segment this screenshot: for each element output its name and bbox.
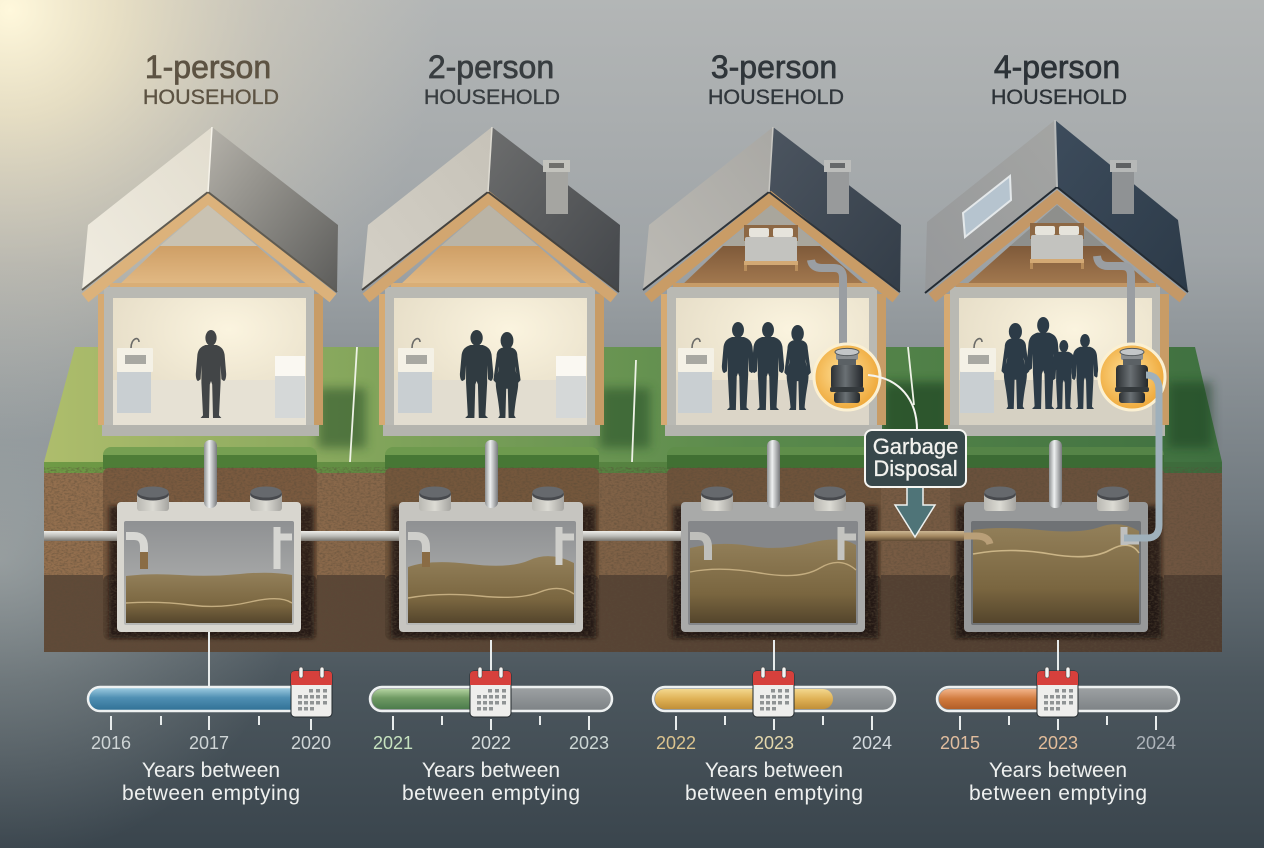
panel: house 2, two people bbox=[362, 127, 620, 436]
caption bbox=[969, 759, 1147, 805]
panel: house 3, three people bbox=[643, 127, 901, 436]
roof bbox=[362, 127, 492, 290]
progress bar bbox=[937, 687, 1179, 711]
heading: 3-person household: HOUSEHOLD bbox=[708, 85, 844, 109]
panel: septic tank 2 bbox=[399, 440, 583, 632]
sludge bbox=[126, 573, 292, 623]
floor bbox=[959, 380, 1152, 425]
timeline: 3-person bbox=[653, 640, 895, 805]
year labels: 2024 bbox=[1136, 733, 1176, 753]
progress bar bbox=[370, 687, 612, 711]
floor bbox=[676, 380, 869, 425]
disposal callout icon: house 4 bbox=[1099, 344, 1165, 410]
calendar icon bbox=[753, 667, 794, 717]
lids bbox=[984, 486, 1129, 511]
lids bbox=[419, 486, 564, 511]
appliance bbox=[275, 356, 305, 418]
year labels bbox=[91, 733, 331, 753]
year labels: 2017 bbox=[189, 733, 229, 753]
year labels: 2021 bbox=[373, 733, 413, 753]
caption: Years between bbox=[705, 759, 843, 782]
leader line to disposal icon bbox=[868, 375, 917, 430]
chimney bbox=[824, 160, 851, 214]
disposal callout icon: house 3 bbox=[814, 344, 880, 410]
heading: 1-person household bbox=[143, 49, 279, 109]
panel: septic tank 3 bbox=[681, 440, 865, 632]
appliance bbox=[556, 356, 586, 418]
heading: 3-person household bbox=[708, 49, 844, 109]
drain pipe bbox=[1097, 256, 1131, 346]
progress bar bbox=[88, 687, 328, 711]
lawn surface bbox=[44, 347, 1222, 462]
vent pipe bbox=[767, 440, 780, 508]
year labels: 2016 bbox=[91, 733, 131, 753]
person silhouette bbox=[196, 330, 226, 418]
roof bbox=[643, 127, 773, 290]
caption: between emptying bbox=[685, 782, 863, 805]
pit around tank 1 bbox=[103, 447, 317, 640]
sink unit bbox=[960, 339, 996, 413]
roof bbox=[82, 127, 212, 290]
bed bbox=[1030, 223, 1084, 269]
progress bar bbox=[653, 687, 895, 711]
disposal drain pipe: house 4 to tank bbox=[1124, 375, 1159, 538]
calendar icon bbox=[291, 667, 332, 717]
tank interior bbox=[124, 521, 294, 625]
tank shell bbox=[681, 502, 865, 632]
heading: 2-person household: 2-person bbox=[428, 49, 554, 85]
ground cross-section block bbox=[44, 347, 1222, 652]
caption bbox=[402, 759, 580, 805]
bed bbox=[744, 225, 798, 271]
inlet and outlet bbox=[690, 527, 856, 560]
sink unit bbox=[117, 339, 153, 413]
tick marks bbox=[676, 716, 872, 730]
panel: septic tank 1 bbox=[117, 440, 301, 632]
year labels: 2024 bbox=[852, 733, 892, 753]
house walls and room bbox=[661, 287, 886, 436]
lids bbox=[701, 486, 846, 511]
year labels: 2022 bbox=[656, 733, 696, 753]
drain pipe bbox=[811, 260, 843, 348]
scum line bbox=[690, 562, 856, 576]
caption: between emptying bbox=[969, 782, 1147, 805]
tank interior bbox=[971, 521, 1141, 625]
tick marks bbox=[393, 716, 589, 730]
sludge bbox=[408, 556, 574, 623]
callout: garbage disposal: Disposal bbox=[873, 456, 958, 481]
heading: 1-person household: HOUSEHOLD bbox=[143, 85, 279, 109]
family silhouettes bbox=[1001, 317, 1098, 409]
attic bbox=[723, 205, 820, 246]
inlet and outlet bbox=[408, 527, 574, 567]
heading: 2-person household: HOUSEHOLD bbox=[424, 85, 560, 109]
family silhouettes bbox=[460, 330, 521, 418]
year labels: 2023 bbox=[754, 733, 794, 753]
sink unit bbox=[398, 339, 434, 413]
timeline: 4-person bbox=[937, 640, 1179, 805]
callout: garbage disposal bbox=[865, 430, 966, 487]
soil grain bbox=[44, 467, 1222, 652]
family silhouettes bbox=[722, 322, 811, 410]
inlet and outlet bbox=[126, 527, 292, 569]
scum line bbox=[126, 599, 292, 606]
caption: Years between bbox=[142, 759, 280, 782]
chimney bbox=[543, 160, 570, 214]
pit around tank 2 bbox=[385, 447, 599, 640]
year labels bbox=[940, 733, 1176, 753]
caption: Years between bbox=[422, 759, 560, 782]
calendar icon bbox=[470, 667, 511, 717]
house walls and room bbox=[379, 287, 604, 436]
heading: 2-person household bbox=[424, 49, 560, 109]
pit around tank 3 bbox=[667, 447, 881, 640]
tick marks bbox=[111, 716, 311, 730]
scum line bbox=[973, 545, 1139, 557]
year labels: 2023 bbox=[569, 733, 609, 753]
vent pipe bbox=[204, 440, 217, 508]
panel: septic tank 4 bbox=[964, 440, 1148, 632]
tank shell bbox=[117, 502, 301, 632]
tank shell bbox=[964, 502, 1148, 632]
year labels: 2020 bbox=[291, 733, 331, 753]
caption: Years between bbox=[989, 759, 1127, 782]
year labels bbox=[373, 733, 609, 753]
tick marks bbox=[960, 716, 1156, 730]
connecting pipes between tanks bbox=[44, 531, 967, 541]
caption: between emptying bbox=[122, 782, 300, 805]
floor bbox=[394, 380, 587, 425]
heading: 4-person household bbox=[991, 49, 1127, 109]
roof bbox=[925, 120, 1057, 293]
year labels bbox=[656, 733, 892, 753]
timeline: 1-person bbox=[88, 632, 332, 805]
sludge bbox=[973, 524, 1139, 623]
house walls and room bbox=[98, 287, 323, 436]
caption: between emptying bbox=[402, 782, 580, 805]
year labels: 2015 bbox=[940, 733, 980, 753]
lids bbox=[137, 486, 282, 511]
inlet and outlet bbox=[964, 527, 1139, 545]
scum line bbox=[408, 588, 574, 598]
chimney bbox=[1110, 160, 1137, 214]
house walls and room bbox=[944, 287, 1169, 436]
vent pipe bbox=[1049, 440, 1062, 508]
panel: house 4, four people bbox=[925, 120, 1188, 436]
pit around tank 4 bbox=[950, 447, 1164, 640]
caption bbox=[122, 759, 300, 805]
attic bbox=[1010, 205, 1105, 246]
floor bbox=[113, 380, 306, 425]
caption bbox=[685, 759, 863, 805]
year labels: 2023 bbox=[1038, 733, 1078, 753]
panel: house 1, one person bbox=[82, 127, 338, 436]
left edge light bbox=[0, 260, 300, 848]
vent pipe bbox=[485, 440, 498, 508]
sink unit bbox=[678, 339, 714, 413]
soil front face bbox=[44, 473, 1222, 575]
heading: 1-person household: 1-person bbox=[145, 49, 271, 85]
tank shell bbox=[399, 502, 583, 632]
sludge bbox=[690, 539, 856, 623]
tank interior bbox=[688, 521, 858, 625]
heading: 3-person household: 3-person bbox=[711, 49, 837, 85]
sunlight glow bbox=[0, 0, 520, 520]
arrow: disposal into pipe bbox=[895, 487, 935, 537]
heading: 4-person household: HOUSEHOLD bbox=[991, 85, 1127, 109]
year labels: 2022 bbox=[471, 733, 511, 753]
tank interior bbox=[406, 521, 576, 625]
callout: garbage disposal: Garbage bbox=[873, 434, 958, 459]
skylight bbox=[963, 176, 1011, 237]
attic bbox=[160, 205, 257, 246]
timeline: 2-person bbox=[370, 640, 612, 805]
calendar icon bbox=[1037, 667, 1078, 717]
heading: 4-person household: 4-person bbox=[994, 49, 1120, 85]
attic bbox=[441, 205, 538, 246]
